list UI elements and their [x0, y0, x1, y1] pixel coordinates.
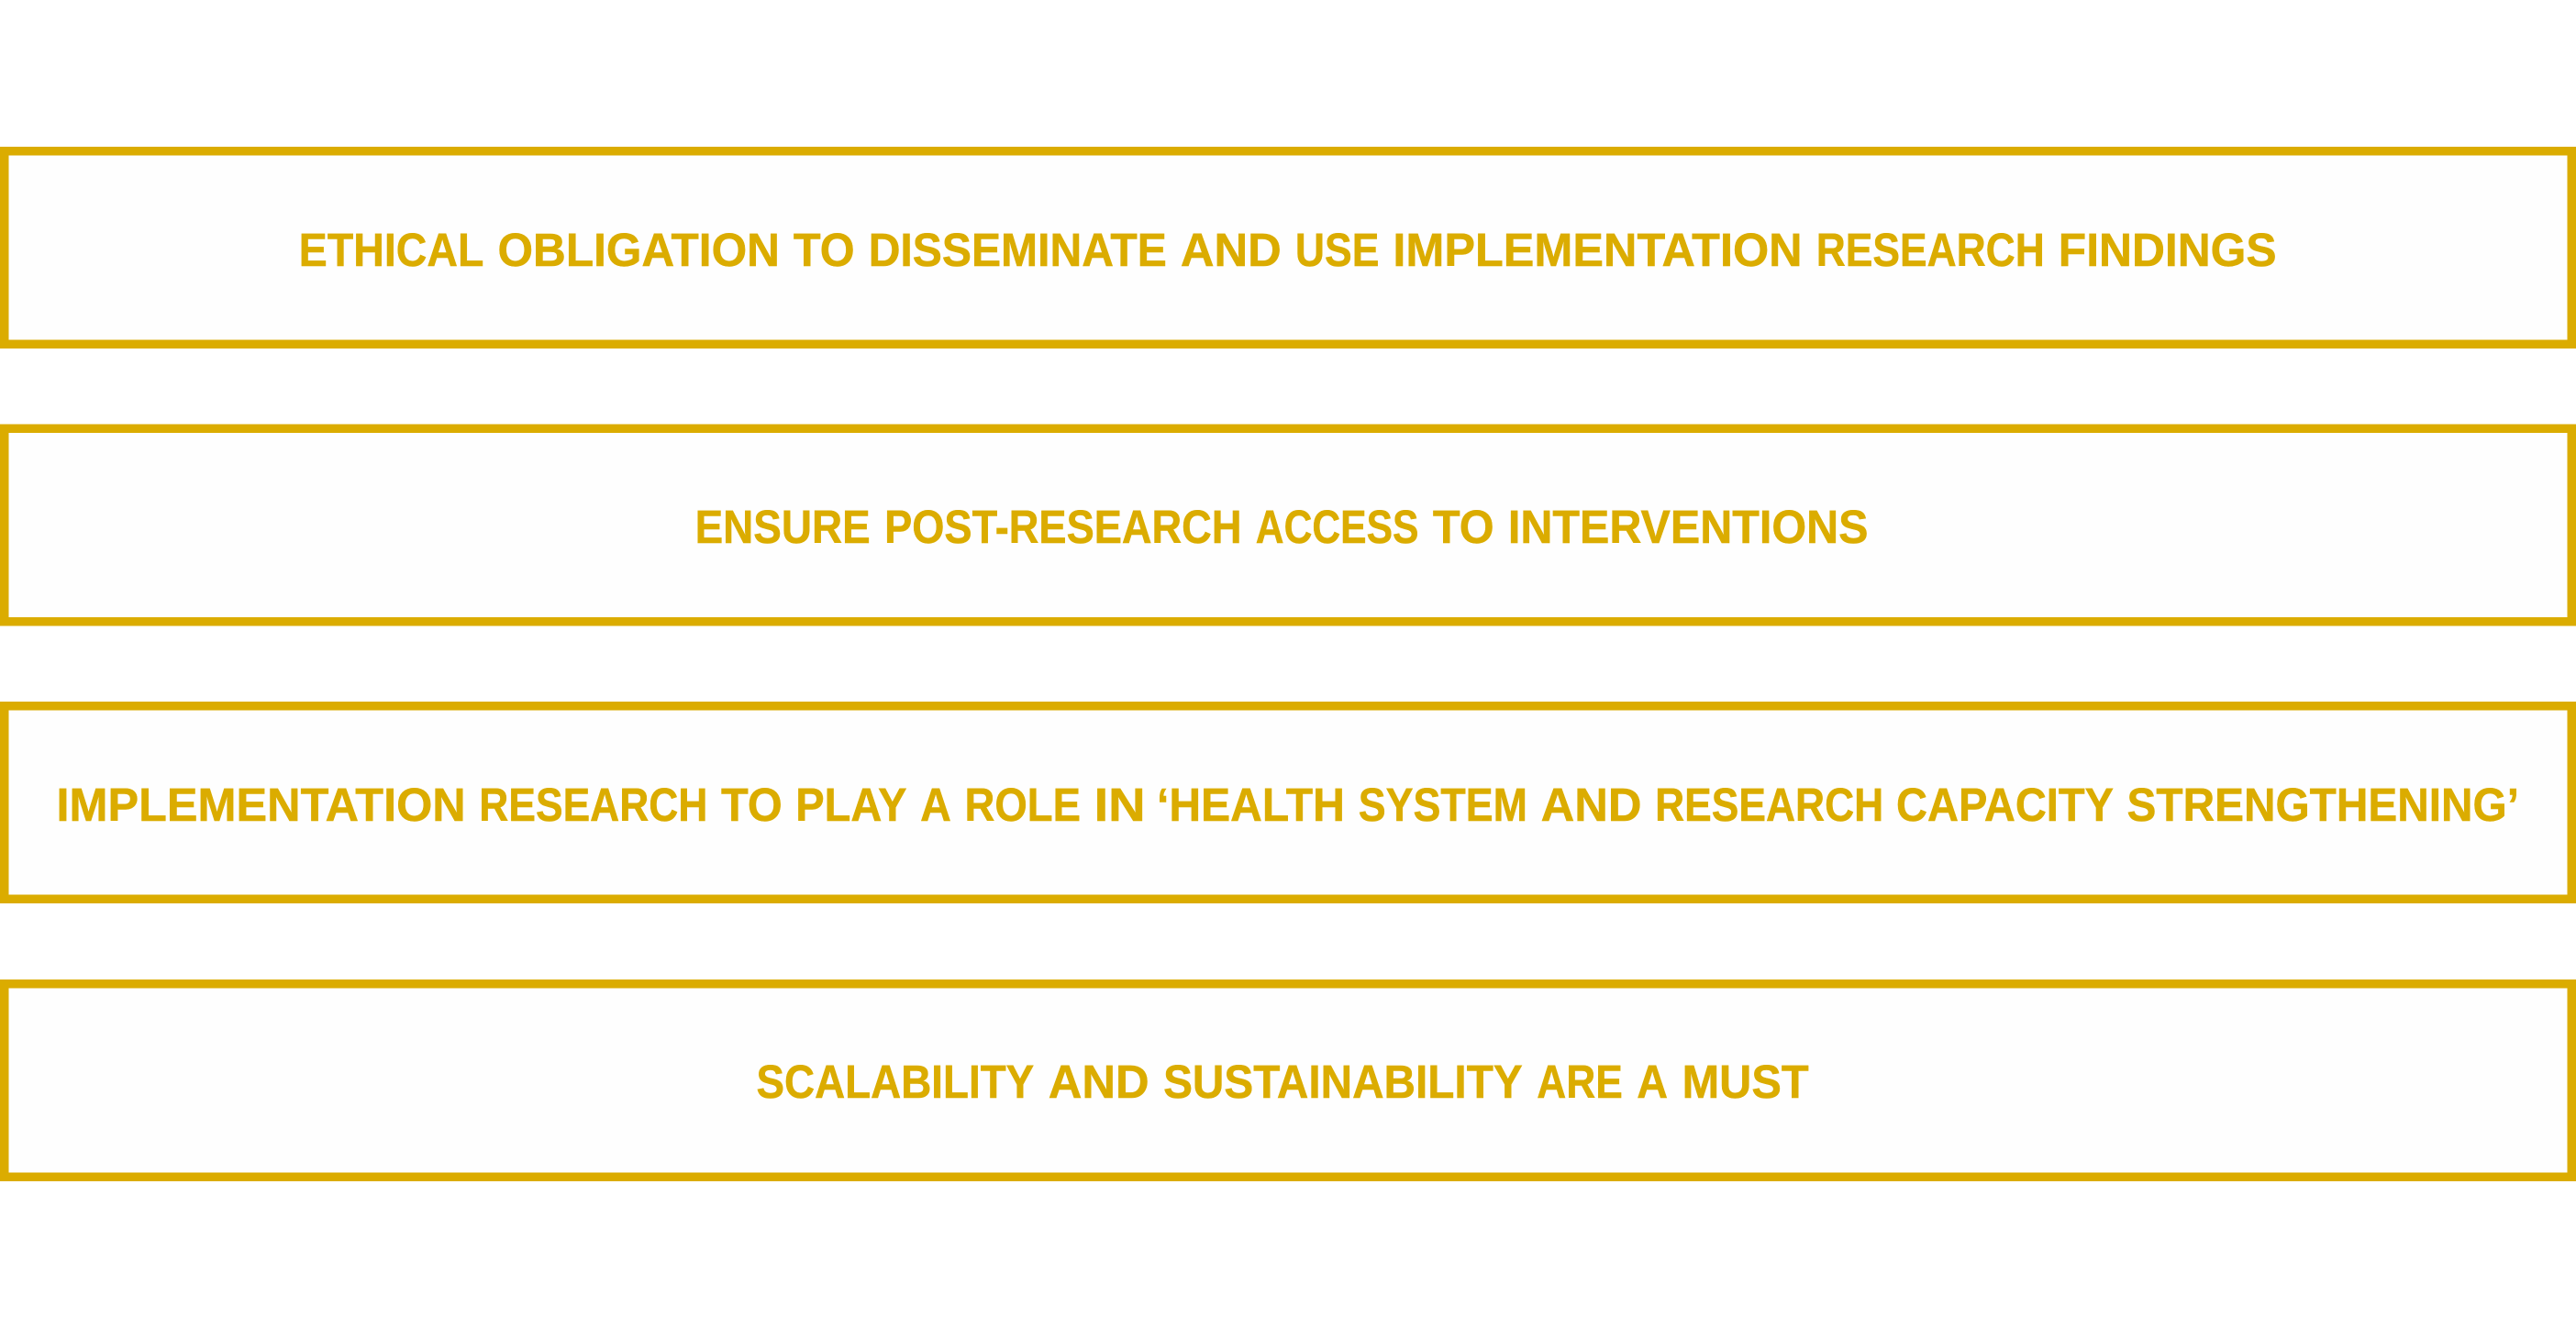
text: post-research access statement: INTERVENTIONS [1508, 501, 1868, 553]
panel: scalability and sustainability [5, 984, 2571, 1177]
panel: health system strengthening [5, 706, 2571, 899]
text: ethical obligation statement: DISSEMINATE [869, 224, 1167, 276]
text: ethical obligation statement: ETHICAL [299, 224, 483, 276]
panel: ethical obligation [5, 151, 2571, 344]
text: ethical obligation statement [299, 224, 2277, 276]
text: health system strengthening statement: RESEARCH [479, 779, 707, 831]
text: ethical obligation statement: AND [1181, 224, 1282, 276]
text: scalability and sustainability statement: MUST [1682, 1056, 1809, 1108]
text: health system strengthening statement: STRENGTHENING’ [2126, 779, 2519, 831]
text: post-research access statement: TO [1433, 501, 1494, 553]
text: scalability and sustainability statement: A [1637, 1056, 1668, 1108]
text: health system strengthening statement: PLAY [795, 779, 906, 831]
text: ethical obligation statement: OBLIGATION [497, 224, 780, 276]
text: ethical obligation statement: FINDINGS [2059, 224, 2277, 276]
text: health system strengthening statement: AND [1541, 779, 1642, 831]
text: scalability and sustainability statement: AND [1049, 1056, 1149, 1108]
text: scalability and sustainability statement [756, 1056, 1809, 1108]
text: health system strengthening statement [57, 779, 2519, 831]
text: post-research access statement: POST-RESEARCH [884, 501, 1242, 553]
text: health system strengthening statement: CAPACITY [1896, 779, 2114, 831]
text: ethical obligation statement: RESEARCH [1816, 224, 2045, 276]
text: scalability and sustainability statement: SUSTAINABILITY [1163, 1056, 1523, 1108]
text: health system strengthening statement: ‘HEALTH [1157, 779, 1345, 831]
text: post-research access statement [695, 501, 1868, 553]
text: health system strengthening statement: A [920, 779, 951, 831]
text: ethical obligation statement: TO [794, 224, 855, 276]
text: scalability and sustainability statement: SCALABILITY [756, 1056, 1034, 1108]
text: post-research access statement: ENSURE [695, 501, 871, 553]
text: scalability and sustainability statement: ARE [1537, 1056, 1623, 1108]
text: ethical obligation statement: IMPLEMENTATION [1393, 224, 1803, 276]
text: health system strengthening statement: TO [721, 779, 783, 831]
text: health system strengthening statement: RESEARCH [1655, 779, 1883, 831]
text: post-research access statement: ACCESS [1256, 501, 1418, 553]
text: health system strengthening statement: IN [1094, 779, 1146, 831]
text: health system strengthening statement: SYSTEM [1359, 779, 1527, 831]
panel: post-research access [5, 428, 2571, 622]
text: ethical obligation statement: USE [1295, 224, 1379, 276]
text: health system strengthening statement: IMPLEMENTATION [57, 779, 466, 831]
text: health system strengthening statement: ROLE [965, 779, 1081, 831]
